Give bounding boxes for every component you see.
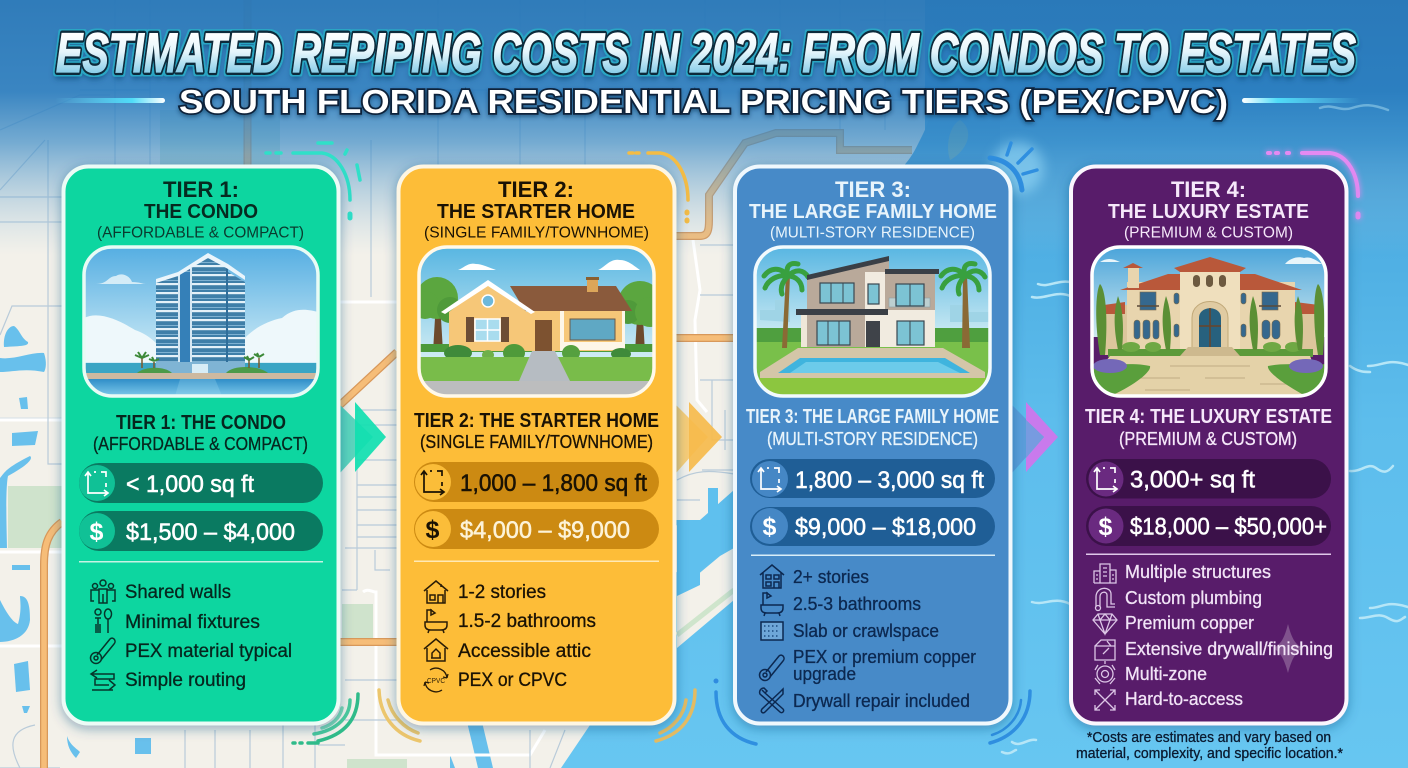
icon: custom plumbing [1096, 588, 1115, 610]
feature list: Premium copper [1125, 613, 1254, 633]
green park areas [8, 110, 407, 768]
icon: dollar: $ [1098, 513, 1112, 541]
tier 1 top heading: (AFFORDABLE & COMPACT) [97, 224, 304, 242]
tier 3 card heading: (MULTI-STORY RESIDENCE) [767, 429, 978, 449]
center tower [1180, 270, 1240, 355]
pool [760, 348, 985, 378]
house [807, 260, 889, 347]
price pill [750, 507, 995, 546]
tier 1 top heading: THE CONDO [144, 201, 258, 223]
icon: cpvc: CPVC [427, 678, 445, 685]
panel: tier 3 the large family home [735, 166, 1010, 724]
square footage pill: 1,000 – 1,800 sq ft [460, 470, 647, 497]
tier 2 top heading [424, 177, 649, 242]
tier 2 top heading: (SINGLE FAMILY/TOWNHOME) [424, 224, 649, 242]
arrow: tier 2 to tier 3 [676, 402, 722, 473]
water ripple waves [1002, 105, 1408, 753]
decorative arcs: tier 2 [379, 153, 695, 741]
tier 4 card heading [1085, 406, 1332, 449]
cypress trees [1096, 284, 1324, 355]
feature list: Slab or crawlspace [793, 621, 939, 641]
decorative arcs: tier 1 [266, 143, 360, 743]
icon: dollar: $ [90, 518, 104, 546]
decorative arcs: tier 4 [1268, 153, 1358, 217]
square footage pill: 1,800 – 3,000 sq ft [795, 467, 984, 494]
tier 3 card heading [746, 406, 999, 449]
tier 2 card heading: (SINGLE FAMILY/TOWNHOME) [420, 432, 653, 452]
price pill: $1,500 – $4,000 [126, 519, 295, 546]
feature list [458, 582, 596, 691]
arrow: tier 1 to tier 2 [340, 402, 386, 473]
windows [1134, 292, 1280, 339]
decorative arcs: tier 3 [714, 142, 1044, 744]
square footage pill [414, 462, 659, 502]
panel: tier 4 the luxury estate [1071, 166, 1346, 724]
palms and greenery [137, 367, 268, 373]
hedges [1108, 349, 1313, 357]
house [510, 286, 632, 311]
tier 4 card heading: TIER 4: THE LUXURY ESTATE [1085, 406, 1332, 428]
square footage pill: < 1,000 sq ft [126, 471, 254, 498]
icon: bathtub [425, 610, 447, 633]
icon: cpvc [424, 668, 448, 692]
feature list: 1.5-2 bathrooms [458, 611, 596, 632]
feature list [125, 582, 292, 691]
orange highways [44, 0, 912, 768]
feature list: Custom plumbing [1125, 588, 1262, 608]
icon: area [421, 471, 444, 495]
feature list: upgrade [793, 664, 856, 684]
icon: diamond [1093, 614, 1117, 634]
feature list: Multi-zone [1125, 664, 1207, 684]
tier 3 top heading [749, 177, 997, 242]
water blobs on left [0, 326, 493, 768]
footnote: material, complexity, and specific location.* [1076, 746, 1343, 762]
subtitle glow line right [1242, 98, 1360, 103]
image: mediterranean luxury estate [1092, 247, 1326, 396]
tier 4 top heading: (PREMIUM & CUSTOM) [1124, 224, 1293, 242]
thin street lines [0, 0, 920, 768]
icon: dollar: $ [426, 516, 440, 544]
feature list: 2.5-3 bathrooms [793, 594, 921, 614]
tier 2 top heading: TIER 2: [498, 177, 574, 202]
icon: drywall [1095, 640, 1115, 660]
tier 2 card heading [414, 410, 659, 452]
price pill: $9,000 – $18,000 [795, 514, 976, 541]
steps and paving [1180, 347, 1240, 356]
tier 1 card heading: (AFFORDABLE & COMPACT) [93, 434, 308, 454]
price pill: $18,000 – $50,000+ [1130, 514, 1327, 540]
icon: pipe [760, 655, 784, 680]
tier 3 top heading: (MULTI-STORY RESIDENCE) [770, 224, 975, 242]
icon: hard-to-access [1095, 690, 1115, 710]
icon: area [758, 468, 781, 492]
white roads [0, 240, 707, 755]
icon: multi-story house [760, 565, 784, 588]
footnote [1076, 730, 1343, 762]
square footage pill: 3,000+ sq ft [1130, 466, 1255, 494]
icon: house [424, 581, 448, 603]
tier 4 top heading [1108, 177, 1309, 242]
bushes [444, 345, 472, 357]
square footage pill [1086, 459, 1331, 498]
feature list: PEX or premium copper [793, 647, 976, 667]
tier 1 card heading [93, 412, 308, 454]
subtitle: SOUTH FLORIDA RESIDENTIAL PRICING TIERS (PEX/CPVC) [179, 84, 1228, 121]
tier 4 top heading: THE LUXURY ESTATE [1108, 201, 1309, 223]
feature list: Minimal fixtures [125, 612, 260, 633]
far wings [1104, 305, 1319, 355]
trees [434, 318, 644, 344]
feature list: Extensive drywall/finishing [1125, 639, 1333, 659]
icon: area [1094, 468, 1117, 492]
tier 2 top heading: THE STARTER HOME [437, 201, 635, 223]
subtitle glow line left [55, 98, 165, 103]
tier 3 card heading: TIER 3: THE LARGE FAMILY HOME [746, 406, 999, 428]
icon: attic [424, 639, 448, 661]
panel: tier 2 the starter home [398, 166, 674, 724]
icon: slab [761, 622, 783, 640]
footnote: *Costs are estimates and vary based on [1087, 730, 1331, 746]
icon: tools [760, 688, 784, 713]
wings [1127, 282, 1295, 354]
tier 4 card heading: (PREMIUM & CUSTOM) [1119, 429, 1297, 449]
icon: bathtub [761, 593, 783, 616]
tier 4 top heading: TIER 4: [1171, 177, 1246, 202]
feature list: Multiple structures [1125, 562, 1271, 582]
feature list: Drywall repair included [793, 691, 970, 711]
feature list: PEX or CPVC [458, 670, 567, 691]
price pill [1086, 506, 1331, 546]
image: modern two-story home with pool [755, 247, 990, 396]
arrow: tier 3 to tier 4 [1012, 402, 1058, 473]
tier 1 top heading [97, 177, 304, 242]
icon: fixtures [95, 609, 112, 633]
tier 3 top heading: TIER 3: [835, 177, 911, 202]
tier 3 top heading: THE LARGE FAMILY HOME [749, 201, 997, 223]
image: condo tower on the waterfront [84, 247, 318, 396]
panel: tier 1 the condo [64, 166, 338, 724]
icon: area [85, 472, 108, 496]
palms [782, 275, 970, 348]
square footage pill [750, 459, 995, 498]
price pill [414, 509, 659, 549]
icon: routing arrows [91, 670, 115, 690]
feature list [793, 567, 976, 711]
feature list: Accessible attic [458, 641, 591, 662]
image: starter house [411, 247, 665, 396]
feature list [1125, 562, 1333, 709]
icon: pipe roll [90, 638, 115, 664]
feature list: Hard-to-access [1125, 689, 1243, 709]
price pill [79, 511, 323, 551]
feature list: Shared walls [125, 582, 231, 603]
price pill: $4,000 – $9,000 [460, 517, 630, 544]
square footage pill [79, 463, 323, 503]
feature list: Simple routing [125, 670, 246, 691]
corner gardens [1092, 364, 1150, 396]
building [156, 258, 226, 362]
tier 2 card heading: TIER 2: THE STARTER HOME [414, 410, 659, 432]
tier 1 top heading: TIER 1: [163, 177, 239, 202]
tier 1 card heading: TIER 1: THE CONDO [116, 412, 286, 434]
feature list: PEX material typical [125, 641, 292, 662]
icon: buildings [1094, 564, 1116, 583]
icon: dollar: $ [762, 513, 776, 541]
icon: multi-zone [1095, 661, 1115, 684]
icon: people [91, 580, 115, 603]
sparkle [1273, 624, 1303, 673]
feature list: 1-2 stories [458, 582, 546, 603]
feature list: 2+ stories [793, 567, 869, 587]
